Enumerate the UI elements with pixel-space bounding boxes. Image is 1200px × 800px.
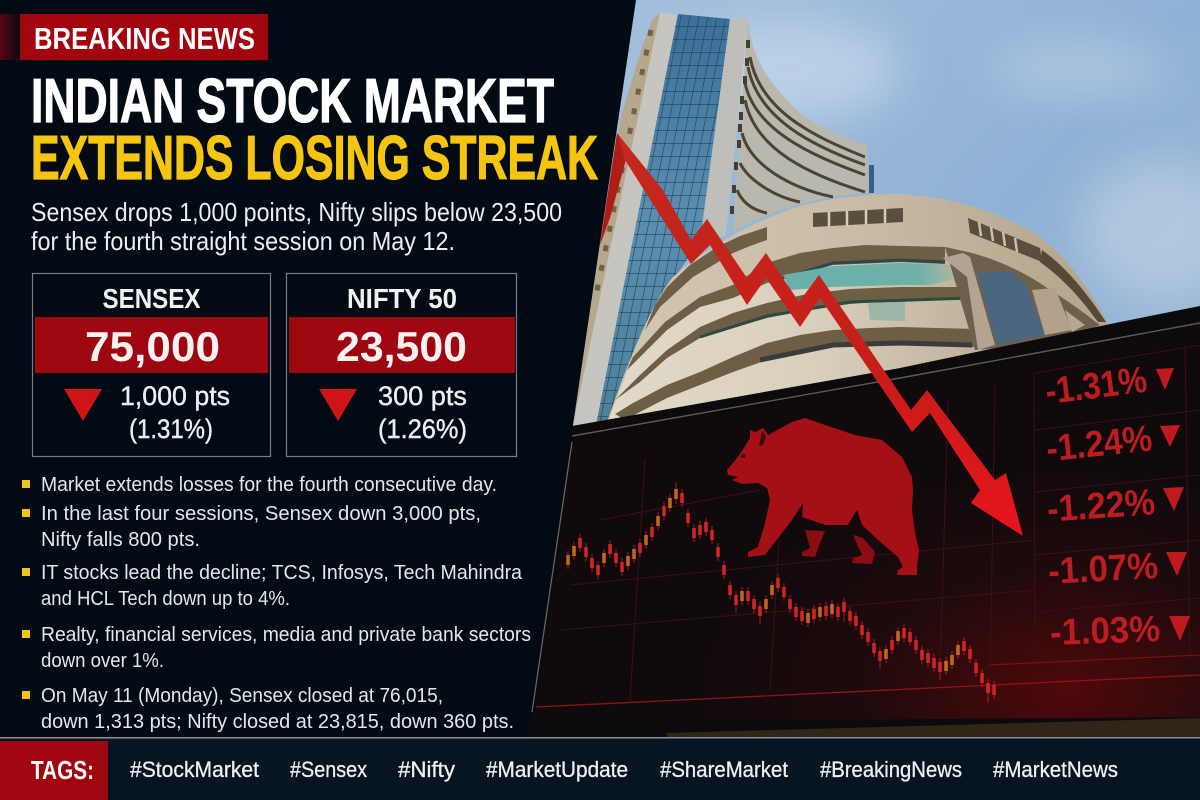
icon: thin red edge wedge bbox=[600, 133, 628, 245]
ticker row -1.31%: -1.31% bbox=[1043, 359, 1149, 412]
dark glass strips in recesses bbox=[780, 260, 945, 279]
arrow: falling red zigzag bbox=[617, 133, 1023, 536]
icon: rounded dome bbox=[607, 194, 1107, 425]
value: 75,000: 75,000 bbox=[85, 323, 220, 370]
ticker: percentage column bbox=[1043, 359, 1190, 653]
columns and curved glass bbox=[943, 253, 1085, 350]
value: 23,500: 23,500 bbox=[336, 323, 467, 370]
hashtag list: #BreakingNews bbox=[820, 757, 962, 782]
panel: dark left background bbox=[0, 0, 636, 740]
bullet 3: IT stocks lead the decline; TCS, Infosys, Tech Mahindra bbox=[41, 561, 523, 584]
title bbox=[31, 67, 598, 193]
title: INDIAN STOCK MARKET bbox=[31, 67, 554, 136]
cream lower bands bbox=[607, 262, 995, 425]
icon: red bear bbox=[727, 418, 919, 575]
icon: tower side balconies bbox=[572, 13, 660, 425]
chart: candlesticks bbox=[568, 482, 994, 703]
ticker row -1.24%: -1.24% bbox=[1044, 417, 1154, 469]
hashtag list: #Nifty bbox=[398, 757, 455, 782]
screen surface bbox=[536, 328, 1200, 722]
change: points and percent: (1.31%) bbox=[129, 414, 213, 444]
bullet 1: Market extends losses for the fourth consecutive day. bbox=[41, 473, 497, 496]
teal glass patch bbox=[783, 263, 965, 290]
hashtag list: #Sensex bbox=[290, 757, 367, 782]
LED display board bbox=[528, 306, 1200, 738]
hashtag list: #ShareMarket bbox=[660, 757, 788, 782]
bullet 3 bbox=[22, 561, 523, 610]
bullet 2: In the last four sessions, Sensex down 3,000 pts, bbox=[41, 502, 481, 525]
bullet 5: On May 11 (Monday), Sensex closed at 76,015, bbox=[41, 684, 443, 707]
panel: Sensex card bbox=[32, 274, 270, 456]
icon: tower glass bbox=[596, 14, 730, 425]
change: points and percent bbox=[120, 381, 230, 444]
panel: Nifty 50 card: NIFTY 50 bbox=[347, 283, 457, 314]
panel: Sensex card: SENSEX bbox=[102, 283, 201, 314]
change: points and percent: 1,000 pts bbox=[120, 381, 230, 411]
icon: curved wing bbox=[732, 20, 874, 232]
bullet 5: down 1,313 pts; Nifty closed at 23,815, down 360 pts. bbox=[41, 710, 514, 733]
icon: down triangle bbox=[319, 389, 357, 421]
bullet 2: Nifty falls 800 pts. bbox=[41, 528, 200, 551]
change: points and percent bbox=[378, 381, 467, 444]
bullet 5 bbox=[22, 684, 514, 733]
title: EXTENDS LOSING STREAK bbox=[31, 124, 598, 193]
badge: breaking news: BREAKING NEWS bbox=[34, 21, 255, 56]
side window row bbox=[968, 218, 1042, 262]
photo: sky and building bbox=[500, 0, 1200, 760]
decorative fade behind badge bbox=[0, 14, 22, 60]
subtitle: for the fourth straight session on May 12. bbox=[31, 226, 455, 256]
bullet 2 bbox=[22, 502, 481, 551]
building seen below the screen bbox=[667, 718, 1200, 737]
hashtag list bbox=[130, 757, 1118, 782]
subtitle bbox=[31, 197, 562, 256]
ticker row -1.07%: -1.07% bbox=[1047, 545, 1159, 592]
ticker row -1.22%: -1.22% bbox=[1046, 481, 1156, 530]
footer: tags bar bbox=[0, 737, 1200, 800]
subtitle: Sensex drops 1,000 points, Nifty slips below 23,500 bbox=[31, 197, 562, 227]
bullet list bbox=[22, 473, 531, 733]
icon: tower concrete bbox=[573, 13, 678, 425]
bullet 4: down over 1%. bbox=[41, 649, 164, 672]
bullet 4: Realty, financial services, media and private bank sectors bbox=[41, 623, 531, 646]
badge: breaking news bbox=[20, 14, 268, 60]
change: points and percent: (1.26%) bbox=[378, 414, 467, 444]
icon: tower right concrete bbox=[700, 19, 748, 245]
recessed window rows under the dome bbox=[615, 227, 975, 420]
ticker row -1.03%: -1.03% bbox=[1049, 608, 1161, 653]
hashtag list: #MarketNews bbox=[993, 757, 1118, 782]
top window row bbox=[813, 208, 903, 227]
bullet 4 bbox=[22, 623, 531, 672]
footer: tags bar: TAGS: bbox=[31, 755, 94, 785]
change: points and percent: 300 pts bbox=[378, 381, 467, 411]
icon: down triangle bbox=[64, 389, 102, 421]
hashtag list: #StockMarket bbox=[130, 757, 259, 782]
hashtag list: #MarketUpdate bbox=[486, 757, 628, 782]
panel: Nifty 50 card bbox=[286, 274, 516, 456]
bullet 3: and HCL Tech down up to 4%. bbox=[41, 587, 290, 610]
